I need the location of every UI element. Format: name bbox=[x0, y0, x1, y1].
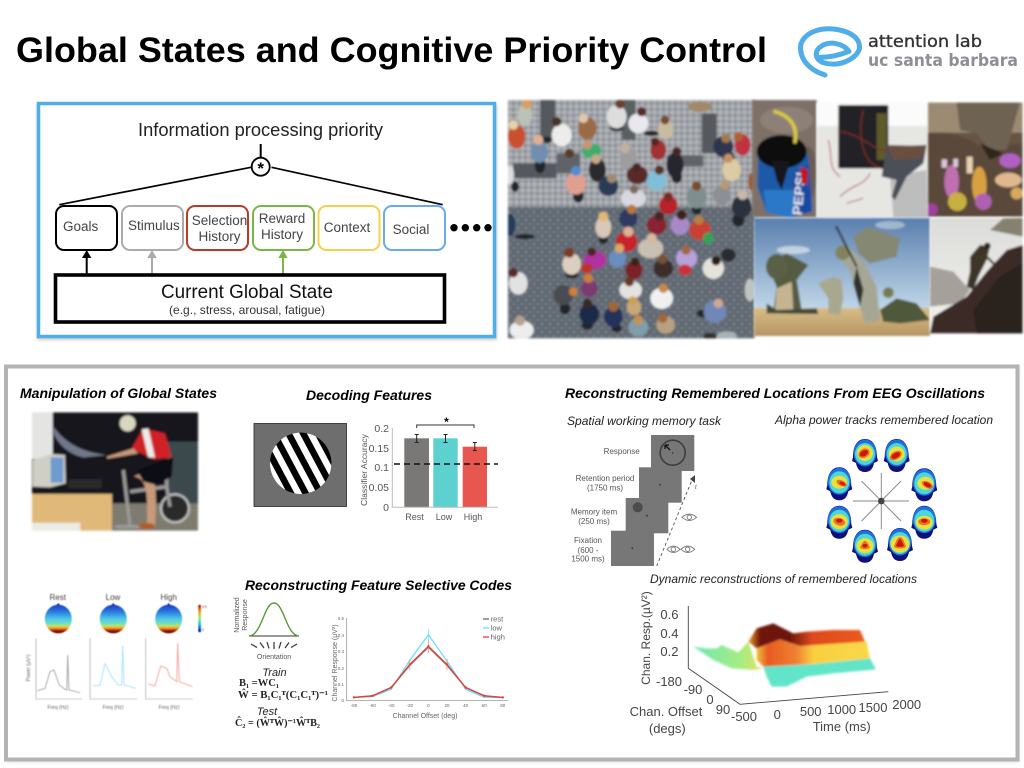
axis labels: Normalized bbox=[234, 597, 241, 633]
spectrum: low bbox=[90, 638, 137, 699]
subheading: spatial working memory task: Spatial working memory task bbox=[567, 414, 722, 428]
axis titles bbox=[630, 704, 871, 736]
y tick labels: 0 bbox=[383, 502, 389, 514]
spectrum: rest bbox=[36, 638, 82, 699]
stage labels: Response bbox=[604, 447, 640, 456]
y ticks: 0.3 bbox=[338, 649, 344, 654]
y tick labels: 0.2 bbox=[374, 423, 389, 435]
series: high bbox=[354, 646, 503, 697]
z tick labels: 0.6 bbox=[660, 607, 678, 622]
location spokes bbox=[853, 473, 909, 529]
colour scale: 0 bbox=[202, 628, 204, 632]
stimulus: oriented grating bbox=[254, 424, 346, 506]
logo: attention lab UC Santa Barbara bbox=[801, 29, 1018, 75]
heads bbox=[509, 99, 748, 326]
tuning curve bbox=[249, 635, 299, 637]
offset ticks: -90 bbox=[684, 682, 702, 697]
y ticks: 0.4 bbox=[338, 633, 344, 638]
time ticks: 500 bbox=[800, 704, 822, 719]
axes bbox=[688, 606, 888, 704]
time ticks: -500 bbox=[731, 709, 757, 724]
x labels bbox=[405, 512, 482, 522]
box: current global state: (e.g., stress, arousal, fatigue) bbox=[169, 303, 325, 317]
title: Global States and Cognitive Priority Control bbox=[16, 31, 767, 70]
scalp topographies bbox=[45, 603, 182, 633]
heading: decoding features: Decoding Features bbox=[306, 387, 432, 403]
figure: alpha power scalp maps bbox=[826, 439, 937, 563]
x ticks: -20 bbox=[407, 703, 414, 708]
y axis title: Classifier Accuracy bbox=[359, 433, 369, 506]
condition labels: Low bbox=[106, 593, 121, 602]
time ticks: 2000 bbox=[892, 697, 921, 712]
box: social: Social bbox=[393, 222, 429, 237]
combination node bbox=[59, 144, 443, 205]
head maps bbox=[852, 439, 878, 472]
y tick labels bbox=[369, 423, 389, 514]
photo: dolls on ground bbox=[926, 103, 1023, 217]
z tick labels: 0.4 bbox=[660, 626, 678, 641]
y ticks: 0.2 bbox=[338, 666, 344, 671]
memory item screen bbox=[626, 498, 668, 533]
low peak error bar bbox=[427, 629, 429, 640]
box: reward history: Reward bbox=[259, 211, 305, 226]
time ticks bbox=[731, 697, 921, 724]
can opening bbox=[757, 135, 807, 168]
equations: train and test: Test bbox=[257, 706, 278, 718]
z axis title: Chan. Resp.(µV²) bbox=[639, 591, 653, 685]
eye icons bbox=[667, 514, 697, 552]
stage labels: Fixation bbox=[574, 536, 602, 545]
photo: cyclist in EEG rig bbox=[32, 412, 198, 531]
panel: experiments bbox=[6, 366, 1019, 762]
subheading: dynamic reconstructions: Dynamic reconstructions of remembered locations bbox=[650, 572, 917, 586]
x ticks: 0 bbox=[427, 703, 430, 708]
photo: crowd from above bbox=[505, 99, 755, 341]
spectrum: high bbox=[146, 638, 193, 699]
equations: train and test: Ĉ₂ = (ŴᵀŴ)⁻¹ŴᵀB₂ bbox=[235, 716, 320, 729]
colour scale bbox=[198, 605, 207, 632]
box: selection history: Selection bbox=[192, 213, 247, 228]
bars bbox=[404, 438, 487, 507]
x ticks: 80 bbox=[500, 703, 506, 708]
heading: information processing priority: Information processing priority bbox=[138, 119, 384, 140]
box: goals bbox=[56, 206, 117, 250]
time ticks: 0 bbox=[774, 707, 781, 722]
box: stimulus: Stimulus bbox=[128, 218, 180, 233]
stage labels: Memory item bbox=[571, 508, 617, 517]
box: context bbox=[318, 206, 380, 250]
axis labels: Freq (Hz) bbox=[158, 705, 180, 711]
legend bbox=[483, 614, 505, 642]
arrow: black to goals bbox=[82, 250, 91, 274]
y ticks: 0.5 bbox=[338, 616, 344, 621]
middle soldier bbox=[818, 277, 843, 315]
x ticks: 60 bbox=[482, 703, 487, 708]
photo: soldier climbing rock bbox=[930, 218, 1023, 333]
markers bbox=[353, 645, 504, 699]
heading: reconstructing feature selective codes: Reconstructing Feature Selective Codes bbox=[245, 577, 512, 593]
box: goals: Goals bbox=[63, 219, 99, 234]
axis titles: Chan. Offset bbox=[630, 704, 703, 719]
x ticks bbox=[351, 703, 506, 708]
surface bbox=[693, 623, 876, 687]
bar chart: classifier accuracy bbox=[359, 415, 498, 522]
series: low bbox=[354, 635, 503, 697]
axis labels: Freq (Hz) bbox=[102, 705, 124, 711]
x ticks: 20 bbox=[444, 703, 450, 708]
x labels: Rest bbox=[405, 512, 424, 522]
stage labels: Retention period bbox=[576, 474, 634, 483]
legend: high bbox=[491, 632, 505, 642]
box: stimulus bbox=[122, 206, 183, 250]
y tick labels: 0.05 bbox=[369, 482, 389, 494]
axis labels: Orientation bbox=[257, 654, 291, 661]
box: selection history bbox=[187, 206, 248, 250]
figure: power spectra by state bbox=[26, 593, 207, 711]
stage labels: (250 ms) bbox=[578, 517, 610, 526]
rider bbox=[133, 470, 156, 527]
axis titles: (degs) bbox=[649, 721, 686, 736]
error bars bbox=[415, 434, 477, 450]
offset ticks bbox=[656, 674, 730, 717]
box: reward history: History bbox=[261, 227, 303, 242]
time ticks: 1500 bbox=[859, 700, 887, 715]
x ticks: -40 bbox=[388, 703, 395, 708]
bodies bbox=[518, 104, 532, 126]
x labels: Low bbox=[436, 512, 453, 522]
x labels: High bbox=[464, 512, 482, 522]
box: current global state bbox=[56, 275, 444, 322]
box: context: Context bbox=[324, 220, 371, 235]
axis titles: Time (ms) bbox=[813, 719, 871, 734]
equations: train and test bbox=[235, 667, 328, 729]
figure: orientation tuning curve bbox=[234, 597, 299, 661]
response screen bbox=[651, 435, 694, 471]
axis labels: Power (µV²) bbox=[26, 654, 32, 681]
main soldier bbox=[835, 247, 880, 323]
chance line bbox=[394, 463, 498, 465]
legend: low bbox=[491, 624, 503, 632]
axis labels: Response bbox=[242, 599, 249, 631]
retention screen bbox=[639, 467, 682, 503]
heading: reconstructing remembered locations: Reconstructing Remembered Locations From EEG Oscillations bbox=[565, 385, 985, 401]
arrow: green to reward history bbox=[278, 250, 288, 274]
box: current global state: Current Global State bbox=[161, 282, 333, 303]
photo: battery device bbox=[817, 103, 928, 217]
condition labels bbox=[49, 593, 177, 602]
box: selection history: History bbox=[198, 229, 241, 244]
z tick labels: 0.2 bbox=[660, 644, 678, 659]
bike bbox=[161, 494, 189, 522]
arrow: grey to stimulus bbox=[147, 250, 157, 274]
fixation screen bbox=[611, 531, 654, 566]
y ticks: 0 bbox=[341, 698, 344, 703]
left soldier bbox=[767, 253, 808, 312]
x ticks: 40 bbox=[463, 703, 469, 708]
box: reward history bbox=[253, 206, 314, 250]
logo text: attention lab: attention lab bbox=[868, 32, 982, 52]
combination node: * bbox=[257, 159, 264, 178]
stage labels: 1500 ms) bbox=[571, 555, 605, 564]
series: rest bbox=[354, 647, 503, 697]
axis labels: Freq (Hz) bbox=[47, 705, 69, 711]
colour scale: 3.5 bbox=[202, 605, 207, 609]
y tick labels: 0.1 bbox=[374, 462, 389, 474]
stage labels: (600 - bbox=[578, 546, 599, 555]
time arrow: t bbox=[695, 485, 697, 491]
3D surface plot: channel response over time bbox=[630, 591, 921, 736]
ellipsis dots bbox=[450, 224, 492, 231]
offset ticks: 90 bbox=[716, 702, 730, 717]
x ticks: -60 bbox=[369, 703, 376, 708]
stage labels bbox=[571, 447, 640, 564]
offset ticks: -180 bbox=[656, 674, 682, 689]
y ticks: 0.1 bbox=[338, 682, 344, 687]
equations: train and test: Ŵ = B₁C₁ᵀ(C₁C₁ᵀ)⁻¹ bbox=[238, 688, 328, 701]
axes bbox=[392, 428, 498, 507]
subheading: alpha power: Alpha power tracks remembered location bbox=[774, 413, 993, 427]
photo: soldiers in desert bbox=[754, 218, 930, 336]
photo: soda can bomb: PEPSI bbox=[790, 171, 808, 216]
equations: train and test: Train bbox=[262, 667, 287, 679]
photo: soda can bomb bbox=[752, 100, 817, 217]
condition labels: High bbox=[160, 593, 177, 602]
stage labels: (1750 ms) bbox=[587, 484, 623, 492]
axis titles: Channel Offset (deg) bbox=[393, 713, 457, 720]
y tick labels: 0.15 bbox=[369, 443, 389, 455]
significance bracket: * bbox=[444, 415, 449, 429]
equations: train and test: B₁ =WC₁ bbox=[239, 678, 279, 689]
error bars bbox=[410, 640, 447, 670]
axis titles bbox=[332, 624, 457, 720]
offset ticks: 0 bbox=[706, 692, 714, 707]
line chart: channel response bbox=[332, 614, 508, 720]
panel: priority model diagram bbox=[37, 104, 497, 340]
can body bbox=[757, 153, 813, 217]
condition labels: Rest bbox=[49, 593, 67, 602]
figure: working memory task timeline bbox=[571, 435, 697, 566]
axis labels bbox=[26, 654, 180, 711]
prone soldier bbox=[880, 298, 930, 323]
dark limbs and shadows bbox=[511, 125, 744, 332]
x ticks: -80 bbox=[351, 703, 358, 708]
time ticks: 1000 bbox=[827, 702, 856, 717]
y ticks bbox=[338, 616, 344, 703]
icon: blue spiral e bbox=[801, 29, 859, 75]
axis labels bbox=[234, 597, 291, 661]
yellow fuse bbox=[775, 112, 796, 142]
box: social bbox=[384, 206, 445, 250]
z tick labels bbox=[660, 607, 678, 659]
axis titles: Channel Response (μV²) bbox=[332, 624, 339, 702]
monitor bbox=[33, 454, 66, 487]
legend: rest bbox=[491, 614, 504, 624]
heading: manipulation of global states: Manipulation of Global States bbox=[20, 385, 217, 401]
orientation bars bbox=[251, 642, 297, 649]
